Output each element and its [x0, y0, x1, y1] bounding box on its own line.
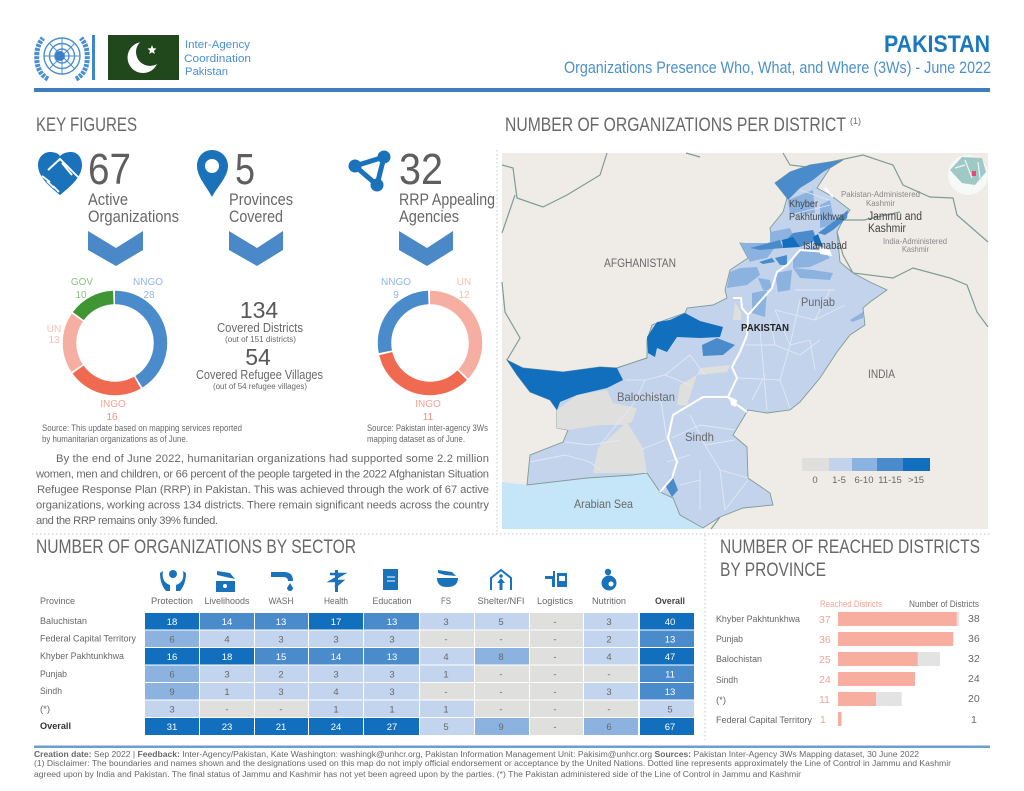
bar: Balochistan — [716, 652, 980, 666]
row: Overall: 9 — [498, 722, 504, 733]
bar: Punjab: Punjab — [716, 634, 743, 645]
row: Punjab: 3 — [333, 670, 339, 680]
map legend: 1-5 — [832, 475, 846, 486]
map labels: Kashmir — [868, 223, 906, 235]
row: Federal Capital Territory: - — [444, 634, 448, 646]
covered districts and refugee villages: 134 — [240, 297, 278, 323]
donut chart: active organizations by type: 28 — [143, 290, 155, 301]
table header: Logistics — [537, 596, 573, 607]
districts 11-15 — [666, 160, 848, 497]
key figure: active organizations — [88, 145, 179, 226]
row: Overall: 6 — [606, 722, 612, 733]
icon: livelihoods — [216, 571, 235, 592]
map labels: Balochistan — [617, 390, 675, 404]
agency name — [184, 39, 251, 78]
row: (*): 1 — [389, 704, 395, 716]
districts 6-10 — [727, 190, 863, 322]
icon: UN emblem — [37, 38, 87, 79]
donut chart: RRP appealing agencies by type: 11 — [423, 412, 434, 423]
sector icons — [160, 569, 616, 592]
map labels: Kashmir — [866, 199, 895, 208]
row: Punjab: - — [553, 670, 557, 680]
icon: logistics — [545, 571, 567, 587]
chevrons — [88, 231, 453, 266]
donut chart: RRP appealing agencies by type: 12 — [458, 290, 470, 301]
row: Federal Capital Territory: Federal Capital Territory — [40, 634, 136, 644]
narrative text block: organizations, working across 134 districts. There remain significant needs across the country — [36, 500, 489, 512]
donut chart: RRP appealing agencies by type: UN — [457, 277, 471, 288]
row: Federal Capital Territory — [40, 630, 694, 647]
map legend: >15 — [908, 475, 924, 486]
bar: Federal Capital Territory: Federal Capital Territory — [716, 715, 812, 726]
row: Sindh: - — [499, 687, 503, 698]
row: (*): 5 — [667, 704, 673, 716]
provincial boundaries — [660, 188, 833, 492]
map background — [502, 153, 988, 529]
row: Khyber Pakhtunkhwa: 14 — [331, 652, 341, 663]
districts over 15 — [507, 234, 823, 410]
covered districts and refugee villages: Covered Districts — [217, 320, 303, 335]
row: Overall: 31 — [167, 722, 177, 733]
icon: protection — [160, 570, 186, 591]
source note left — [42, 423, 242, 444]
districts with no organizations — [557, 302, 741, 473]
row: Sindh: 3 — [389, 687, 395, 698]
covered districts and refugee villages: (out of 54 refugee villages) — [213, 382, 307, 391]
row: Khyber Pakhtunkhwa: Khyber Pakhtunkhwa — [40, 651, 125, 662]
map legend: 0 — [812, 475, 818, 486]
divider bar — [92, 35, 95, 80]
bar: Khyber Pakhtunkhwa: 38 — [968, 613, 980, 625]
map: organizations per district — [502, 153, 988, 529]
icon: network — [348, 150, 390, 192]
map labels: PAKISTAN — [741, 322, 789, 334]
heading: organizations per district: (1) — [850, 116, 861, 126]
row: Overall: 23 — [222, 722, 232, 733]
bar: (*): (*) — [716, 695, 726, 706]
row: Federal Capital Territory: 13 — [665, 634, 675, 646]
row: Baluchistan: Baluchistan — [40, 616, 87, 627]
bar: Balochistan: Balochistan — [716, 654, 762, 665]
map labels: India-Administered — [883, 237, 947, 246]
row: Sindh: - — [444, 687, 448, 698]
row: (*): 3 — [169, 704, 175, 716]
footer notes: agreed upon by India and Pakistan. The final status of Jammu and Kashmir has not yet been agreed upon by the parties. (*) The Pakistan administered side of the Line of Control in Jammu and Kashmir — [34, 770, 801, 779]
key figure: provinces covered: 5 — [235, 145, 255, 194]
source note left: by humanitarian organizations as of June. — [42, 434, 188, 444]
icon: map pin — [197, 150, 228, 197]
header logos — [37, 35, 251, 80]
row: Sindh: 4 — [333, 687, 339, 698]
bar: Punjab: 36 — [819, 634, 831, 646]
Pakistan base — [507, 160, 887, 528]
table header — [40, 596, 685, 607]
row: Punjab: - — [607, 670, 611, 680]
row: (*): - — [553, 704, 557, 716]
donut chart: RRP appealing agencies by type: NNGO — [381, 277, 411, 288]
heading: organizations per district: NUMBER OF ORGANIZATIONS PER DISTRICT — [505, 115, 846, 136]
row: Punjab: 6 — [169, 670, 175, 680]
row: Overall: 67 — [665, 722, 675, 733]
map labels: AFGHANISTAN — [604, 258, 676, 270]
inset globe locator — [948, 155, 988, 195]
row: Federal Capital Territory: 4 — [224, 634, 230, 646]
footer notes: Creation date: Sep 2022 | Feedback: Inter-Agency/Pakistan, Kate Washington: washingk@unhcr.org, Pakistan Information Management Unit: Pakisim@unhcr.org Sources: Pakistan Inter-Agency 3Ws Mapping dataset, 30 June 2022 — [34, 750, 920, 759]
row: Baluchistan: 40 — [665, 617, 675, 628]
row: Baluchistan: 18 — [167, 617, 177, 628]
bar: Sindh: 24 — [968, 673, 980, 685]
bar: Federal Capital Territory: 1 — [971, 714, 977, 726]
row: Sindh: - — [553, 687, 557, 698]
bar: Federal Capital Territory — [716, 712, 977, 726]
table header: WASH — [268, 596, 294, 607]
row: (*): - — [499, 704, 503, 716]
row: Sindh: 3 — [278, 687, 284, 698]
covered districts and refugee villages: (out of 151 districts) — [225, 335, 296, 344]
row: Khyber Pakhtunkhwa: 18 — [222, 652, 232, 663]
row: Khyber Pakhtunkhwa: 15 — [276, 652, 286, 663]
source note left: Source: This update based on mapping services reported — [42, 423, 242, 433]
row: Overall: Overall — [40, 721, 71, 732]
row: Overall — [40, 718, 694, 735]
agency name: Pakistan — [185, 66, 228, 78]
row: Federal Capital Territory: 6 — [169, 634, 175, 646]
map labels: Khyber — [789, 198, 818, 210]
table header: Shelter/NFI — [478, 596, 524, 607]
map labels: Punjab — [801, 295, 835, 309]
row: Sindh: 3 — [606, 687, 612, 698]
donut chart: active organizations by type: NNGO — [133, 277, 163, 288]
icon: FS — [437, 570, 458, 587]
row: Punjab: 1 — [443, 670, 449, 680]
row: Khyber Pakhtunkhwa: 4 — [606, 652, 612, 663]
row: Punjab: Punjab — [40, 669, 67, 680]
bar: Khyber Pakhtunkhwa — [716, 612, 980, 626]
key figure: RRP appealing agencies: 32 — [399, 145, 443, 194]
row: Federal Capital Territory: - — [499, 634, 503, 646]
donut chart: active organizations by type: 16 — [106, 412, 118, 423]
table header: Health — [324, 596, 348, 607]
row: Khyber Pakhtunkhwa: 8 — [498, 652, 504, 663]
table header: Overall — [655, 596, 685, 607]
row: Baluchistan: - — [553, 617, 557, 628]
bar: Khyber Pakhtunkhwa: 37 — [819, 614, 831, 626]
row: Overall: 5 — [443, 722, 449, 733]
donut chart: active organizations by type: 13 — [48, 335, 60, 346]
key figure: provinces covered — [229, 145, 293, 226]
bar: Punjab: 36 — [968, 633, 980, 645]
key figure: RRP appealing agencies — [399, 145, 495, 226]
row: Federal Capital Territory: 2 — [606, 634, 612, 646]
map labels: Arabian Sea — [574, 497, 633, 511]
donut chart: RRP appealing agencies by type: INGO — [415, 399, 441, 410]
row: Punjab: 11 — [665, 670, 675, 680]
heading: reached districts by province: BY PROVINCE — [720, 560, 826, 581]
bar chart: reached districts by province — [716, 599, 980, 726]
agency name: Coordination — [184, 53, 251, 65]
row: Punjab: 3 — [389, 670, 395, 680]
bar: Punjab — [716, 632, 980, 646]
row: Overall: - — [553, 722, 557, 733]
title — [564, 31, 991, 77]
heading: key figures: KEY FIGURES — [36, 115, 137, 136]
source note right: Source: Pakistan inter-agency 3Ws — [367, 423, 488, 433]
row: Baluchistan: 5 — [498, 617, 504, 628]
narrative text block: Refugee Response Plan (RRP) in Pakistan. This was achieved through the work of 67 active — [37, 484, 489, 496]
row: Sindh — [40, 683, 694, 700]
icon: health — [330, 570, 343, 592]
row: Baluchistan: 13 — [276, 617, 286, 628]
row: Baluchistan: 13 — [387, 617, 397, 628]
icon: nutrition — [602, 569, 616, 590]
row: Punjab: - — [499, 670, 503, 680]
row: Baluchistan: 3 — [606, 617, 612, 628]
row: Sindh: 9 — [169, 687, 175, 698]
title: PAKISTAN — [884, 31, 990, 58]
bar: Federal Capital Territory: 1 — [820, 714, 826, 726]
map legend — [802, 458, 930, 486]
footer rule — [34, 746, 990, 748]
table header: Province — [40, 596, 75, 607]
row: (*): - — [279, 704, 283, 716]
narrative text block: By the end of June 2022, humanitarian organizations had supported some 2.2 million — [56, 453, 489, 465]
narrative text block: women, men and children, or 66 percent of the people targeted in the 2022 Afghanistan Situation — [35, 468, 489, 480]
map legend: 11-15 — [878, 475, 902, 486]
donut chart: active organizations by type: 10 — [75, 290, 87, 301]
icon: education — [383, 569, 398, 590]
heading: organizations by sector: NUMBER OF ORGANIZATIONS BY SECTOR — [36, 537, 356, 558]
row: Baluchistan: 14 — [222, 617, 232, 628]
donut chart: active organizations by type: GOV — [71, 277, 93, 288]
row: Khyber Pakhtunkhwa — [40, 648, 694, 664]
key figure: provinces covered: Covered — [229, 207, 283, 226]
donut chart: active organizations by type: INGO — [100, 399, 126, 410]
key figure: active organizations: Active — [88, 190, 128, 209]
row: (*): - — [607, 704, 611, 716]
row: Sindh: 1 — [224, 687, 230, 698]
district boundaries — [530, 355, 748, 510]
row: Sindh: Sindh — [40, 686, 62, 697]
map labels: INDIA — [868, 369, 895, 381]
row: Federal Capital Territory: 3 — [278, 634, 284, 646]
key figure: active organizations: 67 — [88, 145, 131, 194]
bar: Khyber Pakhtunkhwa: Khyber Pakhtunkhwa — [716, 614, 801, 625]
bar: Sindh: Sindh — [716, 675, 738, 686]
neighbouring borders — [502, 153, 988, 529]
row: Punjab — [40, 666, 694, 682]
agency name: Inter-Agency — [185, 39, 251, 51]
map labels: Pakhtunkhwa — [789, 211, 844, 223]
icon: shelter — [491, 570, 511, 590]
footer notes: (1) Disclaimer: The boundaries and names shown and the designations used on this map do not imply official endorsement or acceptance by the United Nations. Dotted line represents approximately the Line of Control in Jammu and Kashmir — [34, 759, 951, 768]
key figure: RRP appealing agencies: RRP Appealing — [399, 190, 495, 209]
map labels: Kashmir — [902, 245, 929, 254]
key figure: provinces covered: Provinces — [229, 190, 293, 209]
row: Federal Capital Territory: - — [553, 634, 557, 646]
key figure: RRP appealing agencies: Agencies — [399, 207, 459, 226]
row: Khyber Pakhtunkhwa: 4 — [443, 652, 449, 663]
map labels: Jammu and — [868, 211, 922, 223]
table header: Education — [372, 596, 412, 607]
row: Baluchistan — [40, 613, 694, 630]
row: (*): (*) — [40, 704, 50, 715]
row: (*): 1 — [333, 704, 339, 716]
bar chart column headers — [820, 599, 979, 609]
row: Overall: 21 — [276, 722, 286, 733]
row: Khyber Pakhtunkhwa: - — [553, 652, 557, 663]
row: Punjab: 2 — [278, 670, 284, 680]
bar: Sindh — [716, 672, 980, 686]
row: (*): 1 — [443, 704, 449, 716]
bar: Sindh: 24 — [819, 674, 831, 686]
narrative text block: and the RRP remains only 39% funded. — [36, 515, 218, 527]
bar: (*): 11 — [819, 694, 830, 706]
footer notes — [34, 750, 951, 779]
row: Overall: 27 — [387, 722, 397, 733]
table header: Nutrition — [592, 596, 626, 607]
sea — [502, 473, 703, 529]
header rule — [34, 88, 990, 92]
row: Baluchistan: 17 — [331, 617, 341, 628]
bar chart column headers: Number of Districts — [909, 599, 979, 609]
covered districts and refugee villages: 54 — [245, 344, 271, 370]
table header: Protection — [151, 596, 193, 607]
row: (*): - — [225, 704, 229, 716]
table: organizations by sector — [40, 613, 694, 735]
source note right: mapping dataset as of June. — [367, 434, 465, 444]
map legend: 6-10 — [854, 475, 874, 486]
narrative text block — [35, 453, 489, 527]
row: (*) — [40, 700, 694, 717]
icon: Pakistan flag — [108, 35, 179, 80]
table header: Livelihoods — [204, 596, 250, 607]
row: Khyber Pakhtunkhwa: 47 — [665, 652, 675, 663]
row: Baluchistan: 3 — [443, 617, 449, 628]
covered districts and refugee villages — [196, 297, 323, 391]
icon: WASH — [271, 572, 293, 591]
bar: Balochistan: 32 — [968, 653, 980, 665]
map labels — [574, 190, 947, 511]
covered districts and refugee villages: Covered Refugee Villages — [196, 367, 323, 382]
row: Federal Capital Territory: 3 — [389, 634, 395, 646]
map labels: Pakistan-Administered — [841, 190, 920, 199]
icon: heart handshake — [38, 152, 82, 195]
bar: Balochistan: 25 — [819, 654, 831, 666]
table header: FS — [441, 596, 451, 607]
bar chart column headers: Reached Districts — [820, 599, 882, 609]
heading: reached districts by province — [720, 537, 980, 581]
donut chart: RRP appealing agencies by type: 9 — [393, 290, 399, 301]
donut chart: active organizations by type — [47, 277, 163, 423]
row: Federal Capital Territory: 3 — [333, 634, 339, 646]
row: Sindh: 13 — [665, 687, 675, 698]
key figure: active organizations: Organizations — [88, 207, 179, 226]
map labels: Islamabad — [803, 240, 847, 252]
donut chart: RRP appealing agencies by type — [381, 277, 476, 423]
map labels: Sindh — [685, 430, 714, 444]
row: Overall: 24 — [331, 722, 341, 733]
bar: (*): 20 — [968, 693, 980, 705]
bar: (*) — [716, 692, 980, 706]
source note right — [367, 423, 488, 444]
row: Khyber Pakhtunkhwa: 13 — [387, 652, 397, 663]
row: Khyber Pakhtunkhwa: 16 — [167, 652, 177, 663]
row: Punjab: 3 — [224, 670, 230, 680]
donut chart: active organizations by type: UN — [47, 324, 61, 335]
